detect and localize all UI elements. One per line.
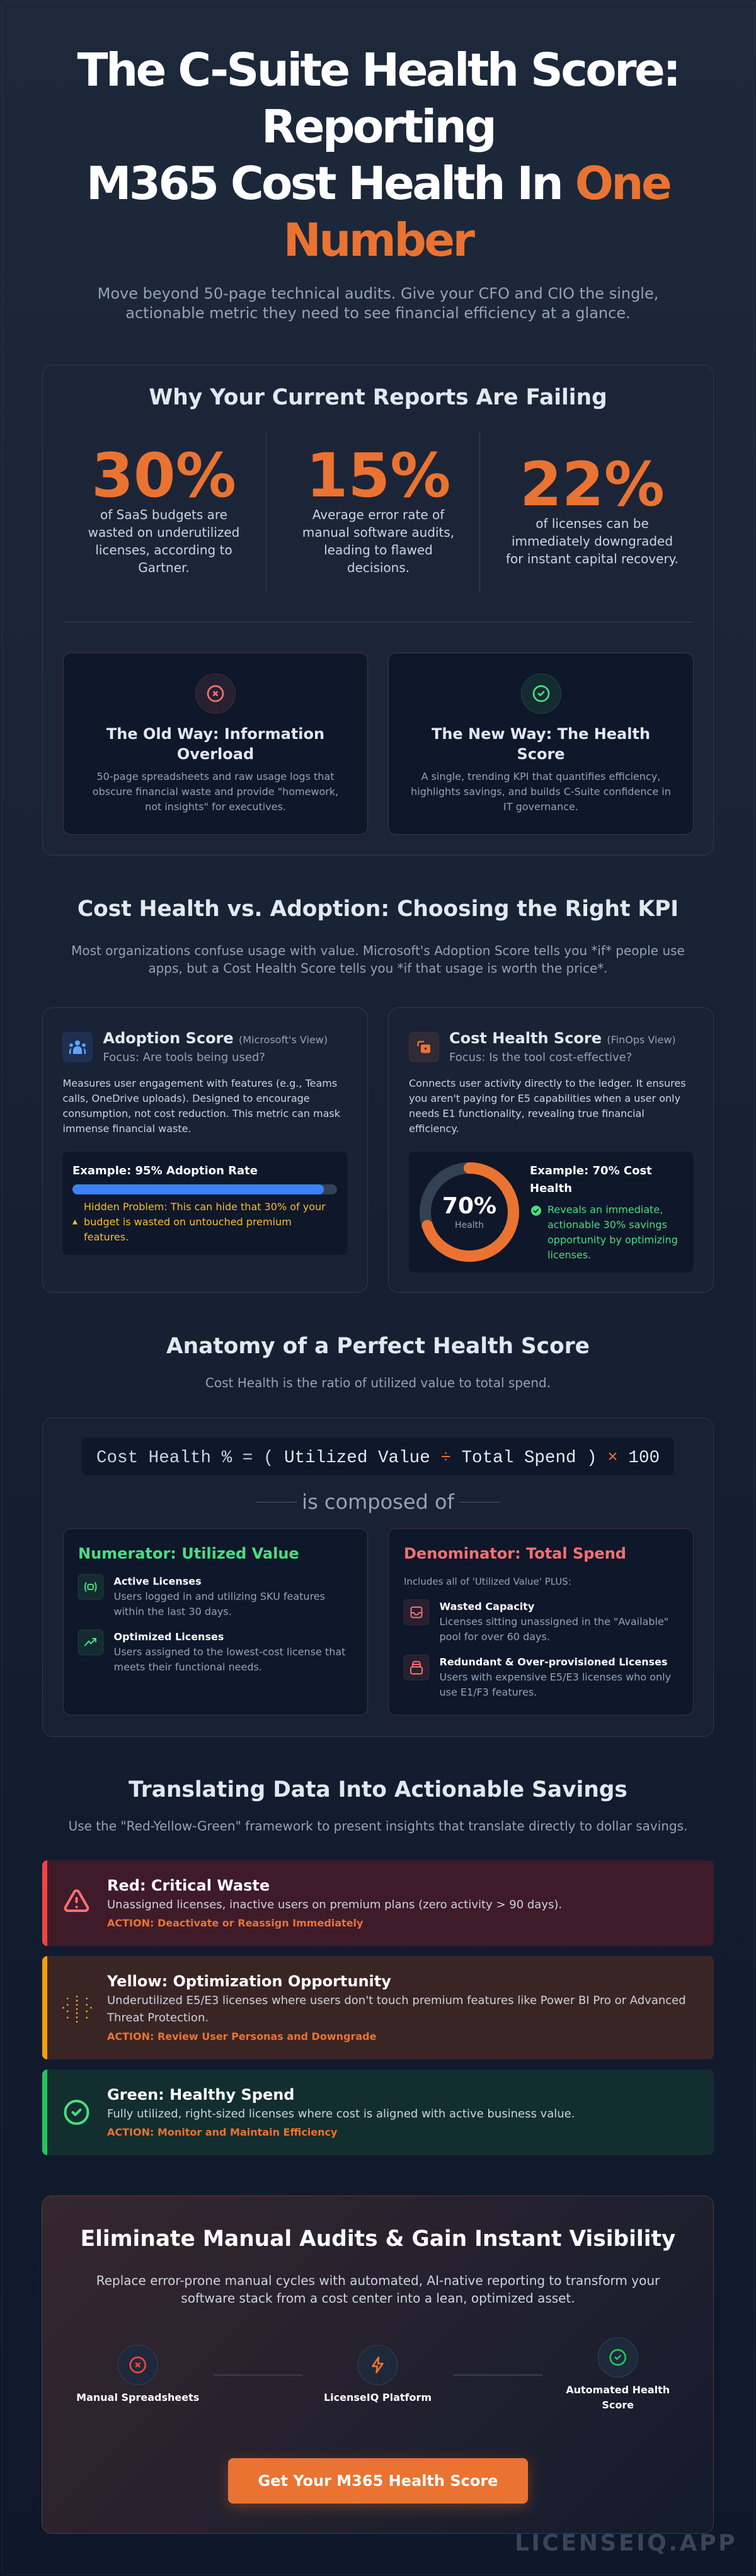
card text: 50-page spreadsheets and raw usage logs that <box>97 770 334 782</box>
card heading: The Old Way: Information <box>106 725 324 743</box>
step: licenseiq platform <box>324 2345 432 2403</box>
formula <box>82 1438 674 1475</box>
stat: 22%: for instant capital recovery. <box>506 551 679 566</box>
card: denominator <box>388 1528 693 1715</box>
card text: Connects user activity directly to the ledger. It ensures <box>409 1077 686 1089</box>
text <box>96 2273 660 2306</box>
card text: IT governance. <box>503 801 578 813</box>
stat: 15% <box>302 440 454 575</box>
card text: you aren't paying for E5 capabilities when a user only <box>409 1092 680 1104</box>
callout text: licenses. <box>547 1249 591 1261</box>
warning text: budget is wasted on untouched premium <box>84 1216 292 1228</box>
formula: Cost Health % = ( Utilized Value ÷ Total Spend ) × 100 <box>96 1448 660 1468</box>
icon: dotted <box>62 1996 92 2023</box>
callout: red: Red: Critical Waste <box>107 1877 270 1894</box>
example box <box>63 1152 348 1255</box>
section heading: anatomy <box>166 1334 590 1390</box>
example title: Example: 70% Cost <box>530 1164 652 1177</box>
icon: check circle <box>522 674 561 713</box>
stat: 15%: 15% <box>306 440 450 511</box>
section intro: Most organizations confuse usage with value. Microsoft's Adoption Score tells you *if* people use <box>71 943 685 958</box>
card heading: Overload <box>177 745 254 763</box>
section heading: cost health vs adoption: Cost Health vs. Adoption: Choosing the Right KPI <box>77 896 679 922</box>
card text: efficiency. <box>409 1123 459 1135</box>
header <box>77 43 679 322</box>
subtitle <box>98 285 658 322</box>
callout: yellow: Underutilized E5/E3 licenses where users don't touch premium features like Power BI Pro or Advanced <box>107 1994 686 2007</box>
callout: green: Fully utilized, right-sized licenses where cost is aligned with active business value. <box>107 2107 575 2121</box>
stat: 22%: of licenses can be <box>536 516 649 531</box>
item: wasted capacity: pool for over 60 days. <box>440 1630 550 1643</box>
section intro: apps, but a Cost Health Score tells you *if that usage is worth the price*. <box>148 961 608 976</box>
title: M365 Cost Health In One <box>86 157 670 210</box>
step: automated health score: Score <box>602 2399 634 2411</box>
card text: Measures user engagement with features (e.g., Teams <box>63 1077 337 1089</box>
card text: immense financial waste. <box>63 1123 192 1135</box>
stat: 15%: manual software audits, <box>302 525 454 540</box>
callout text: Reveals an immediate, <box>547 1203 663 1216</box>
item: active licenses <box>78 1574 325 1618</box>
section heading: cost health vs adoption <box>71 896 685 976</box>
card text: highlights savings, and builds C-Suite confidence in <box>411 786 671 798</box>
stat: 15%: Average error rate of <box>312 507 445 522</box>
callout: green <box>42 2069 714 2155</box>
panel: why reports fail <box>43 365 713 856</box>
section heading: anatomy: Anatomy of a Perfect Health Score <box>166 1334 590 1359</box>
stat: 22% <box>506 449 679 566</box>
icon: cost <box>410 1032 438 1062</box>
item: active licenses: Users logged in and utilizing SKU features <box>113 1590 325 1603</box>
warning text: Hidden Problem: This can hide that 30% of your <box>84 1201 326 1213</box>
connector label: is composed of <box>302 1490 455 1514</box>
example box <box>409 1152 694 1273</box>
callout text <box>547 1203 678 1261</box>
panel: cost health score <box>388 1008 713 1293</box>
card heading <box>106 725 324 763</box>
callout text: actionable 30% savings <box>547 1218 667 1231</box>
callout: yellow: ACTION: Review User Personas and Downgrade <box>107 2030 377 2042</box>
card text: obscure financial waste and provide "homework, <box>93 786 338 798</box>
stat: 30%: licenses, according to <box>95 542 232 558</box>
example box: Example: 95% Adoption Rate <box>72 1164 258 1177</box>
callout: yellow <box>42 1956 714 2059</box>
callout: yellow: Yellow: Optimization Opportunity <box>106 1972 391 1990</box>
card text: consumption, not cost reduction. This metric can mask <box>63 1108 341 1119</box>
warning text <box>84 1201 326 1243</box>
card text <box>411 770 671 813</box>
card text: A single, trending KPI that quantifies efficiency, <box>421 770 660 782</box>
card: new way <box>388 653 693 834</box>
card text <box>409 1077 686 1135</box>
item: active licenses: within the last 30 days. <box>113 1605 232 1618</box>
step: automated health score <box>566 2337 670 2411</box>
stat: 22%: 22% <box>520 449 665 520</box>
title: Reporting <box>261 100 495 153</box>
stat: 15%: decisions. <box>347 560 410 575</box>
item: optimized licenses: Users assigned to the lowest-cost license that <box>113 1646 345 1658</box>
heading: Eliminate Manual Audits & Gain Instant Visibility <box>81 2226 675 2252</box>
panel: anatomy <box>43 1417 713 1736</box>
stat: 30%: wasted on underutilized <box>88 525 239 540</box>
section heading: translating data: Translating Data Into Actionable Savings <box>129 1777 627 1802</box>
stat: 30%: 30% <box>91 440 236 511</box>
watermark: LICENSEIQ.APP <box>515 2530 737 2556</box>
callout: red: ACTION: Deactivate or Reassign Immediately <box>107 1917 364 1929</box>
item: redundant licenses: Redundant & Over-provisioned Licenses <box>440 1656 668 1668</box>
item: wasted capacity: Licenses sitting unassigned in the "Available" <box>440 1615 668 1628</box>
section heading: translating data <box>69 1777 687 1833</box>
card heading: The New Way: The Health <box>432 725 650 743</box>
card heading <box>432 725 650 763</box>
warning text: features. <box>84 1231 129 1243</box>
card heading: Denominator: Total Spend <box>404 1545 626 1562</box>
step: manual spreadsheets <box>76 2345 199 2403</box>
title: The C-Suite Health Score: <box>77 43 679 96</box>
subtitle: Move beyond 50-page technical audits. Give your CFO and CIO the single, <box>98 285 658 302</box>
stat: 30%: of SaaS budgets are <box>100 507 227 522</box>
callout: red: Unassigned licenses, inactive users on premium plans (zero activity > 90 days). <box>107 1898 562 1911</box>
button <box>228 2458 528 2504</box>
callout: green: Green: Healthy Spend <box>107 2086 294 2104</box>
panel: call to action <box>42 2196 713 2534</box>
button: Get Your M365 Health Score <box>258 2472 498 2490</box>
card focus: Focus: Are tools being used? <box>103 1051 265 1064</box>
card text: not insights" for executives. <box>145 801 286 813</box>
panel: adoption score <box>43 1008 368 1293</box>
callout: green: ACTION: Monitor and Maintain Efficiency <box>107 2126 338 2138</box>
card text <box>63 1077 341 1135</box>
card title: Adoption Score (Microsoft's View) <box>103 1029 328 1047</box>
bar chart <box>72 1184 337 1194</box>
item: active licenses: Active Licenses <box>113 1575 202 1588</box>
item: redundant licenses: use E1/F3 features. <box>440 1686 537 1698</box>
item: redundant licenses: Users with expensive E5/E3 licenses who only <box>440 1671 671 1683</box>
item: optimized licenses: meets their functional needs. <box>113 1661 262 1673</box>
card heading: Numerator: Utilized Value <box>78 1545 299 1562</box>
item: optimized licenses: Optimized Licenses <box>113 1630 224 1643</box>
donut chart: 70% <box>442 1193 496 1219</box>
section intro: Use the "Red-Yellow-Green" framework to present insights that translate directly to dollar savings. <box>69 1818 687 1833</box>
donut chart <box>425 1168 513 1256</box>
text: Replace error-prone manual cycles with automated, AI-native reporting to transform your <box>96 2273 660 2288</box>
icon: warning <box>72 1220 77 1225</box>
text: software stack from a cost center into a lean, optimized asset. <box>181 2291 575 2306</box>
callout: yellow: Threat Protection. <box>106 2011 209 2025</box>
stat: 30% <box>88 440 239 575</box>
item: wasted capacity <box>404 1600 668 1643</box>
section intro <box>71 943 685 976</box>
title: Number <box>284 214 475 266</box>
icon: people <box>63 1032 92 1062</box>
card focus: Focus: Is the tool cost-effective? <box>449 1051 632 1064</box>
card: old way <box>63 653 368 834</box>
card heading: Score <box>517 745 565 763</box>
heading: Why Your Current Reports Are Failing <box>149 385 607 410</box>
stat: 22%: immediately downgraded <box>512 534 673 549</box>
example title <box>530 1164 652 1195</box>
item: optimized licenses <box>78 1630 345 1673</box>
icon: x circle <box>195 674 236 713</box>
step: manual spreadsheets: Manual Spreadsheets <box>76 2391 199 2403</box>
card: numerator <box>63 1528 368 1715</box>
example title: Health <box>530 1182 572 1195</box>
card text: calls, OneDrive uploads). Designed to encourage <box>63 1092 310 1104</box>
callout: red <box>42 1860 714 1946</box>
callout text: opportunity by optimizing <box>547 1234 678 1246</box>
step: licenseiq platform: LicenseIQ Platform <box>324 2391 432 2403</box>
step: automated health score: Automated Health <box>566 2384 670 2396</box>
subtitle: actionable metric they need to see financial efficiency at a glance. <box>125 304 631 322</box>
stat: 15%: leading to flawed <box>324 542 433 558</box>
icon: warning triangle <box>66 1891 88 1911</box>
section intro: Cost Health is the ratio of utilized value to total spend. <box>205 1375 551 1390</box>
title <box>77 43 679 266</box>
icon: check <box>531 1206 541 1216</box>
item: redundant licenses <box>404 1655 671 1698</box>
icon: check circle <box>66 2101 88 2124</box>
item: wasted capacity: Wasted Capacity <box>440 1600 535 1613</box>
card title: Cost Health Score (FinOps View) <box>449 1029 676 1047</box>
donut chart: Health <box>455 1220 484 1230</box>
stat: 30%: Gartner. <box>138 560 190 575</box>
card text: needs E1 functionality, revealing true financial <box>409 1108 644 1119</box>
card note: Includes all of 'Utilized Value' PLUS: <box>404 1576 571 1588</box>
card text <box>93 770 338 813</box>
